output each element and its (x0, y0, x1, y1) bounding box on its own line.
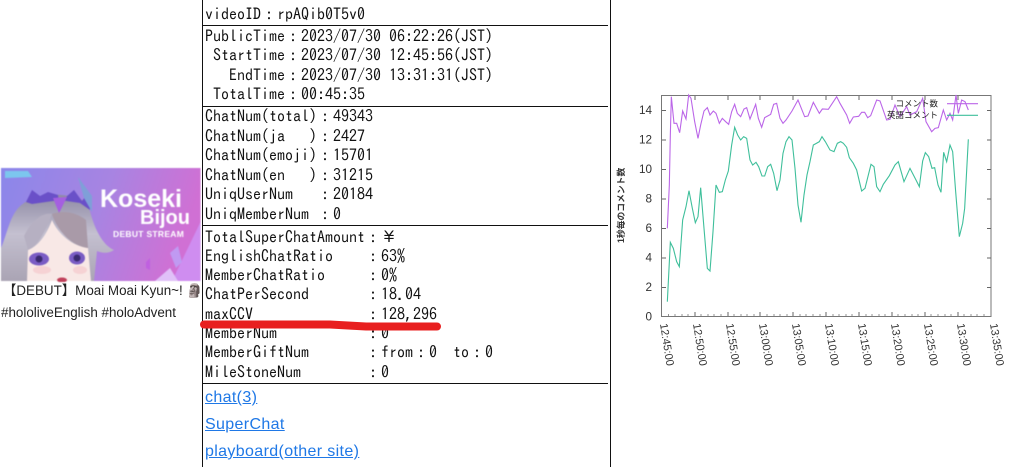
x axis tick labels: 12:45:00 (657, 323, 676, 367)
x axis tick labels: 12:55:00 (723, 323, 742, 367)
panel: times: EndTime：2023/07/30 13:31:31(JST) (229, 67, 493, 83)
y axis tick labels: 12 (639, 134, 652, 146)
x axis tick labels: 13:30:00 (954, 323, 973, 367)
y axis tick labels: 8 (645, 192, 652, 206)
panel: super chat and ratio stats: maxCCV ：128,296 (205, 306, 437, 322)
panel: chat counts: ChatNum(emoji)：15701 (205, 147, 373, 163)
series: total comments (667, 95, 968, 228)
y axis tick labels: 2 (645, 281, 652, 294)
panel: video id: videoID：rpAQib0T5v0 (205, 6, 365, 22)
panel: super chat and ratio stats: EnglishChatRatio ：63% (205, 248, 405, 264)
chart legend: コメント数 (895, 98, 938, 108)
panel: super chat and ratio stats (205, 229, 493, 380)
x axis tick labels: 12:50:00 (690, 323, 709, 367)
x axis tick labels: 13:15:00 (855, 323, 874, 367)
y axis tick labels: 10 (639, 163, 652, 176)
panel: super chat and ratio stats: MemberGiftNum ：from：0 to：0 (205, 344, 493, 360)
link: SuperChat: SuperChat (205, 416, 285, 433)
panel: super chat and ratio stats: MileStoneNum ：0 (205, 364, 389, 380)
link: chat: chat(3) (205, 389, 257, 406)
panel: times: TotalTime：00:45:35 (213, 86, 365, 102)
y axis tick labels: 6 (645, 222, 652, 235)
panel: chat counts: UniqUserNum ：20184 (205, 186, 373, 202)
x axis tick labels (657, 323, 1006, 367)
panel: chat counts: ChatNum(en )：31215 (205, 167, 373, 183)
hashtags: #hololiveEnglish #holoAdvent (1, 305, 176, 320)
panel: super chat and ratio stats: TotalSuperChatAmount：￥ (205, 229, 397, 245)
character hair and crown (1, 177, 114, 281)
column divider left (202, 0, 203, 467)
panel: times: PublicTime：2023/07/30 06:22:26(JST) (205, 28, 493, 44)
panel: super chat and ratio stats: MemberNum ：0 (205, 325, 389, 341)
y axis tick labels: 14 (639, 104, 652, 117)
chart axes and ticks (662, 96, 991, 316)
series: English comments (667, 127, 968, 302)
x axis tick labels: 13:00:00 (756, 323, 775, 367)
panel: video thumbnail (0, 167, 202, 283)
panel: times: StartTime：2023/07/30 12:45:56(JST) (213, 47, 493, 63)
thumbnail logo text: DEBUT STREAM (113, 229, 184, 239)
y axis title: 1秒毎のコメント数 (615, 168, 626, 243)
panel: chat counts (205, 108, 373, 222)
video title: 【DEBUT】Moai Moai Kyun~! 🗿 (3, 283, 203, 298)
link: playboard: playboard(other site) (205, 443, 359, 460)
y axis tick labels: 0 (645, 310, 652, 324)
panel: super chat and ratio stats: MemberChatRatio ：0% (205, 267, 397, 283)
panel: chat counts: ChatNum(ja )：2427 (205, 128, 365, 144)
panel: times (205, 28, 493, 102)
chart legend: 英語コメント (887, 110, 938, 120)
x axis tick labels: 13:35:00 (987, 323, 1006, 367)
thumbnail logo text: Bijou (140, 207, 190, 229)
x axis tick labels: 13:20:00 (888, 323, 907, 367)
x axis tick labels: 13:10:00 (822, 323, 841, 367)
y axis tick labels (639, 104, 652, 324)
column divider right (610, 0, 611, 467)
x axis tick labels: 13:05:00 (789, 323, 808, 367)
thumbnail logo text: Koseki (100, 185, 182, 213)
panel: chat counts: ChatNum(total)：49343 (205, 108, 373, 124)
thumbnail logo text (100, 185, 190, 239)
panel: super chat and ratio stats: ChatPerSecond ：18.04 (205, 286, 421, 302)
panel: chat counts: UniqMemberNum ：0 (205, 206, 341, 222)
chart legend (887, 98, 978, 120)
x axis tick labels: 13:25:00 (921, 323, 940, 367)
y axis tick labels: 4 (645, 252, 652, 264)
icon: anime eyes and mouth (29, 252, 87, 282)
